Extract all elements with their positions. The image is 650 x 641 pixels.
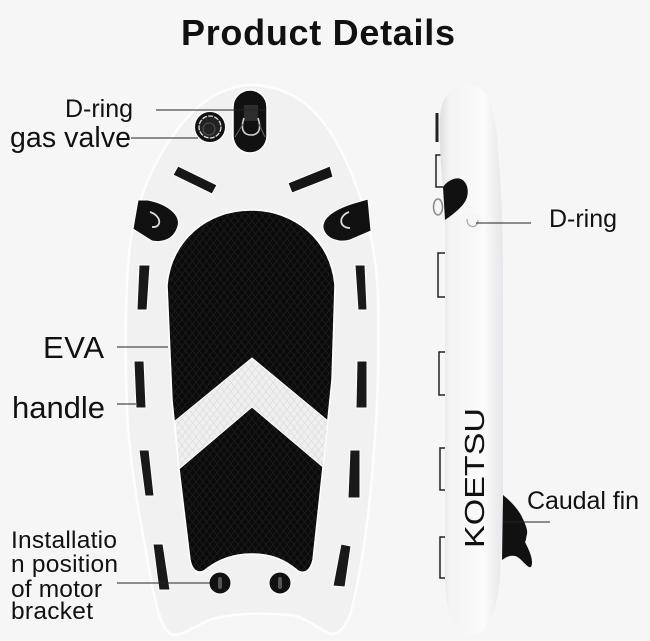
side D-ring mounts <box>133 199 371 242</box>
label: handle: handle <box>12 390 105 425</box>
label: installation position: Installatio <box>11 527 117 554</box>
side handles <box>134 265 367 590</box>
brand logo: KOETSU <box>459 408 490 548</box>
label: installation position: bracket <box>11 598 93 625</box>
top D-ring mount <box>233 90 267 153</box>
board body <box>126 85 378 635</box>
panel: board top view <box>126 85 378 635</box>
front handles <box>173 166 333 194</box>
label: gas valve: gas valve <box>10 122 131 154</box>
caudal fin <box>502 495 532 567</box>
label: installation position <box>11 527 118 625</box>
label: D-ring: D-ring <box>65 95 133 123</box>
side handles <box>436 113 445 578</box>
deck pad <box>167 210 335 572</box>
label: installation position: n position <box>11 551 118 578</box>
label: caudal fin: Caudal fin <box>527 487 639 515</box>
black D-ring mount <box>443 178 468 220</box>
label: side D-ring: D-ring <box>549 205 617 233</box>
motor bracket mounts <box>209 572 291 594</box>
icon: gas valve <box>194 112 226 142</box>
label: installation position: of motor <box>11 576 102 603</box>
D-ring <box>434 199 442 215</box>
panel: board side view <box>434 85 532 635</box>
leader lines <box>117 110 550 583</box>
label: EVA: EVA <box>43 330 104 365</box>
side D-ring patch <box>462 213 482 233</box>
white chevron <box>175 358 328 469</box>
title: Product Details <box>181 12 455 53</box>
side body <box>440 85 503 635</box>
